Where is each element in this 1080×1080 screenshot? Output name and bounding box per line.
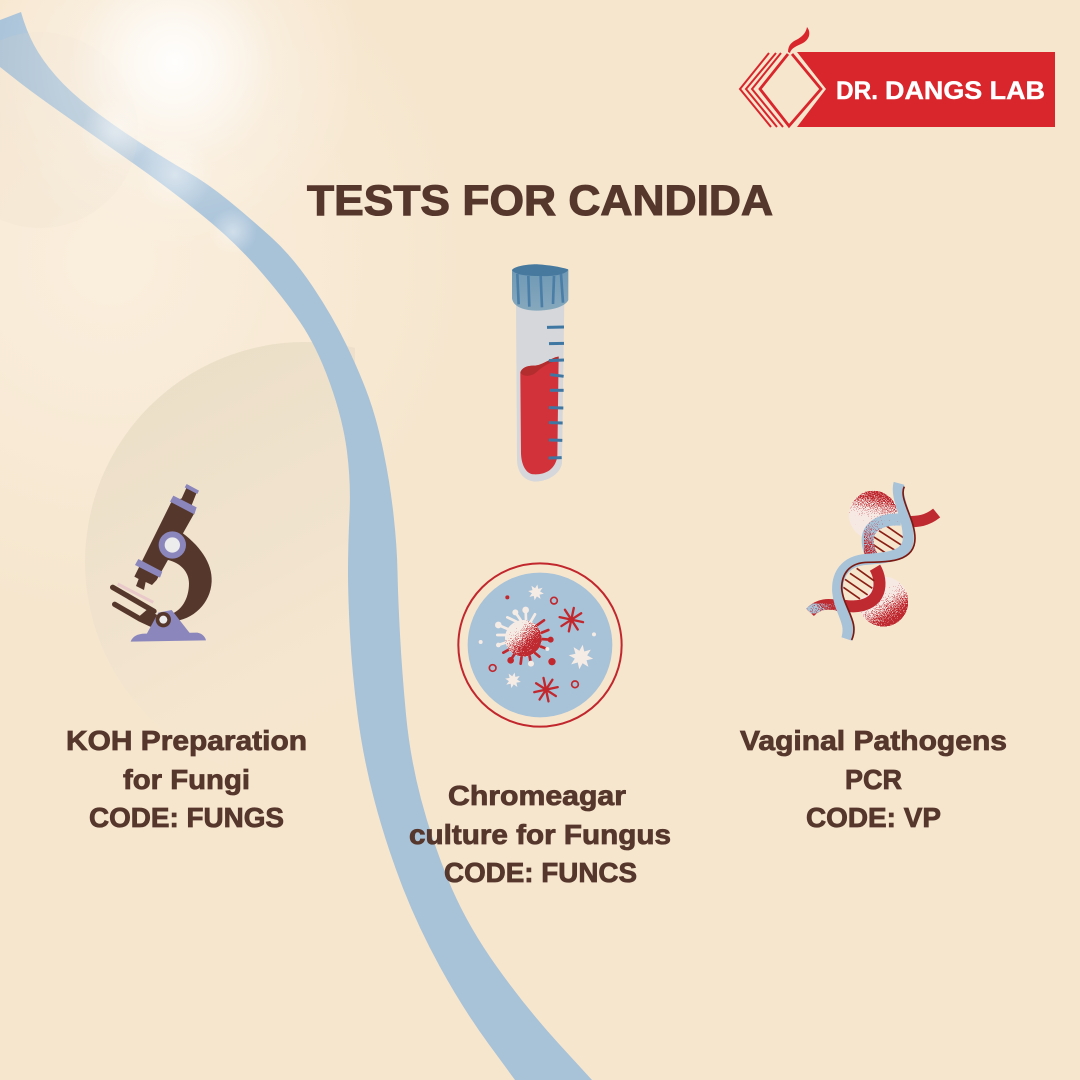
icon: microscope	[113, 484, 212, 642]
label: Chromeagar culture: Chromeagar	[448, 780, 626, 811]
tube glass	[516, 300, 564, 482]
stage	[113, 587, 157, 627]
speckled circles	[849, 491, 908, 627]
red asterisks	[532, 605, 586, 704]
label: Chromeagar culture	[409, 780, 671, 888]
lens flares on ribbon	[81, 98, 257, 256]
top-left faint disc	[0, 32, 138, 228]
upper arc	[868, 520, 901, 559]
base joint	[156, 612, 171, 627]
white stars	[504, 583, 595, 690]
sun glare	[0, 0, 365, 252]
microscope arm	[165, 530, 212, 622]
stage connector	[140, 609, 160, 627]
virus spikes	[497, 610, 551, 664]
label: KOH Preparation	[66, 725, 307, 833]
label: Chromeagar culture: culture for Fungus	[409, 819, 671, 850]
main blue strand	[838, 483, 908, 639]
icon: DNA helix	[810, 483, 937, 640]
logo diamond mark	[740, 53, 821, 127]
label: KOH Preparation: for Fungi	[123, 764, 250, 795]
logo: Dr. Dangs Lab	[740, 27, 1055, 127]
spike tips	[495, 607, 554, 667]
base	[131, 610, 206, 642]
logo banner	[797, 52, 1055, 127]
dish ring	[458, 563, 622, 727]
graduation ticks	[547, 327, 564, 458]
speckled tail	[810, 604, 840, 612]
tube bands	[135, 484, 199, 578]
label: Vaginal Pathogens PCR: PCR	[845, 764, 902, 795]
glass slide	[118, 584, 153, 602]
virus body	[505, 620, 542, 657]
dish culture	[468, 573, 612, 717]
cap top	[512, 264, 568, 276]
blood	[520, 357, 559, 474]
icon: petri dish with fungus	[458, 563, 622, 727]
logo flame	[788, 27, 809, 53]
top lens	[873, 523, 906, 558]
label: Vaginal Pathogens PCR: Vaginal Pathogens	[740, 725, 1007, 756]
dots and rings	[479, 595, 596, 688]
focus knob	[159, 531, 186, 559]
icon: test tube	[512, 264, 568, 482]
cap ribs	[517, 274, 563, 307]
upper arc speckle	[868, 520, 901, 559]
cap	[512, 270, 568, 311]
label: KOH Preparation: KOH Preparation	[66, 725, 307, 756]
bottom lens	[843, 567, 873, 600]
base pair stripes	[843, 525, 904, 599]
label: KOH Preparation: CODE: FUNGS	[89, 802, 284, 833]
label: Vaginal Pathogens PCR	[740, 725, 1007, 833]
title: TESTS FOR CANDIDA	[307, 177, 773, 225]
background warm glow	[0, 0, 480, 640]
background disc behind microscope	[86, 342, 355, 550]
logo text: DR.	[836, 77, 878, 105]
blue curved ribbon	[0, 12, 592, 1080]
dark strand line	[842, 487, 915, 640]
microscope tube	[134, 487, 197, 590]
logo text: DANGS LAB	[885, 77, 1045, 105]
blood surface	[520, 357, 559, 376]
label: Vaginal Pathogens PCR: CODE: VP	[806, 802, 941, 833]
label: Chromeagar culture: CODE: FUNCS	[444, 857, 637, 888]
red strands	[810, 513, 937, 612]
